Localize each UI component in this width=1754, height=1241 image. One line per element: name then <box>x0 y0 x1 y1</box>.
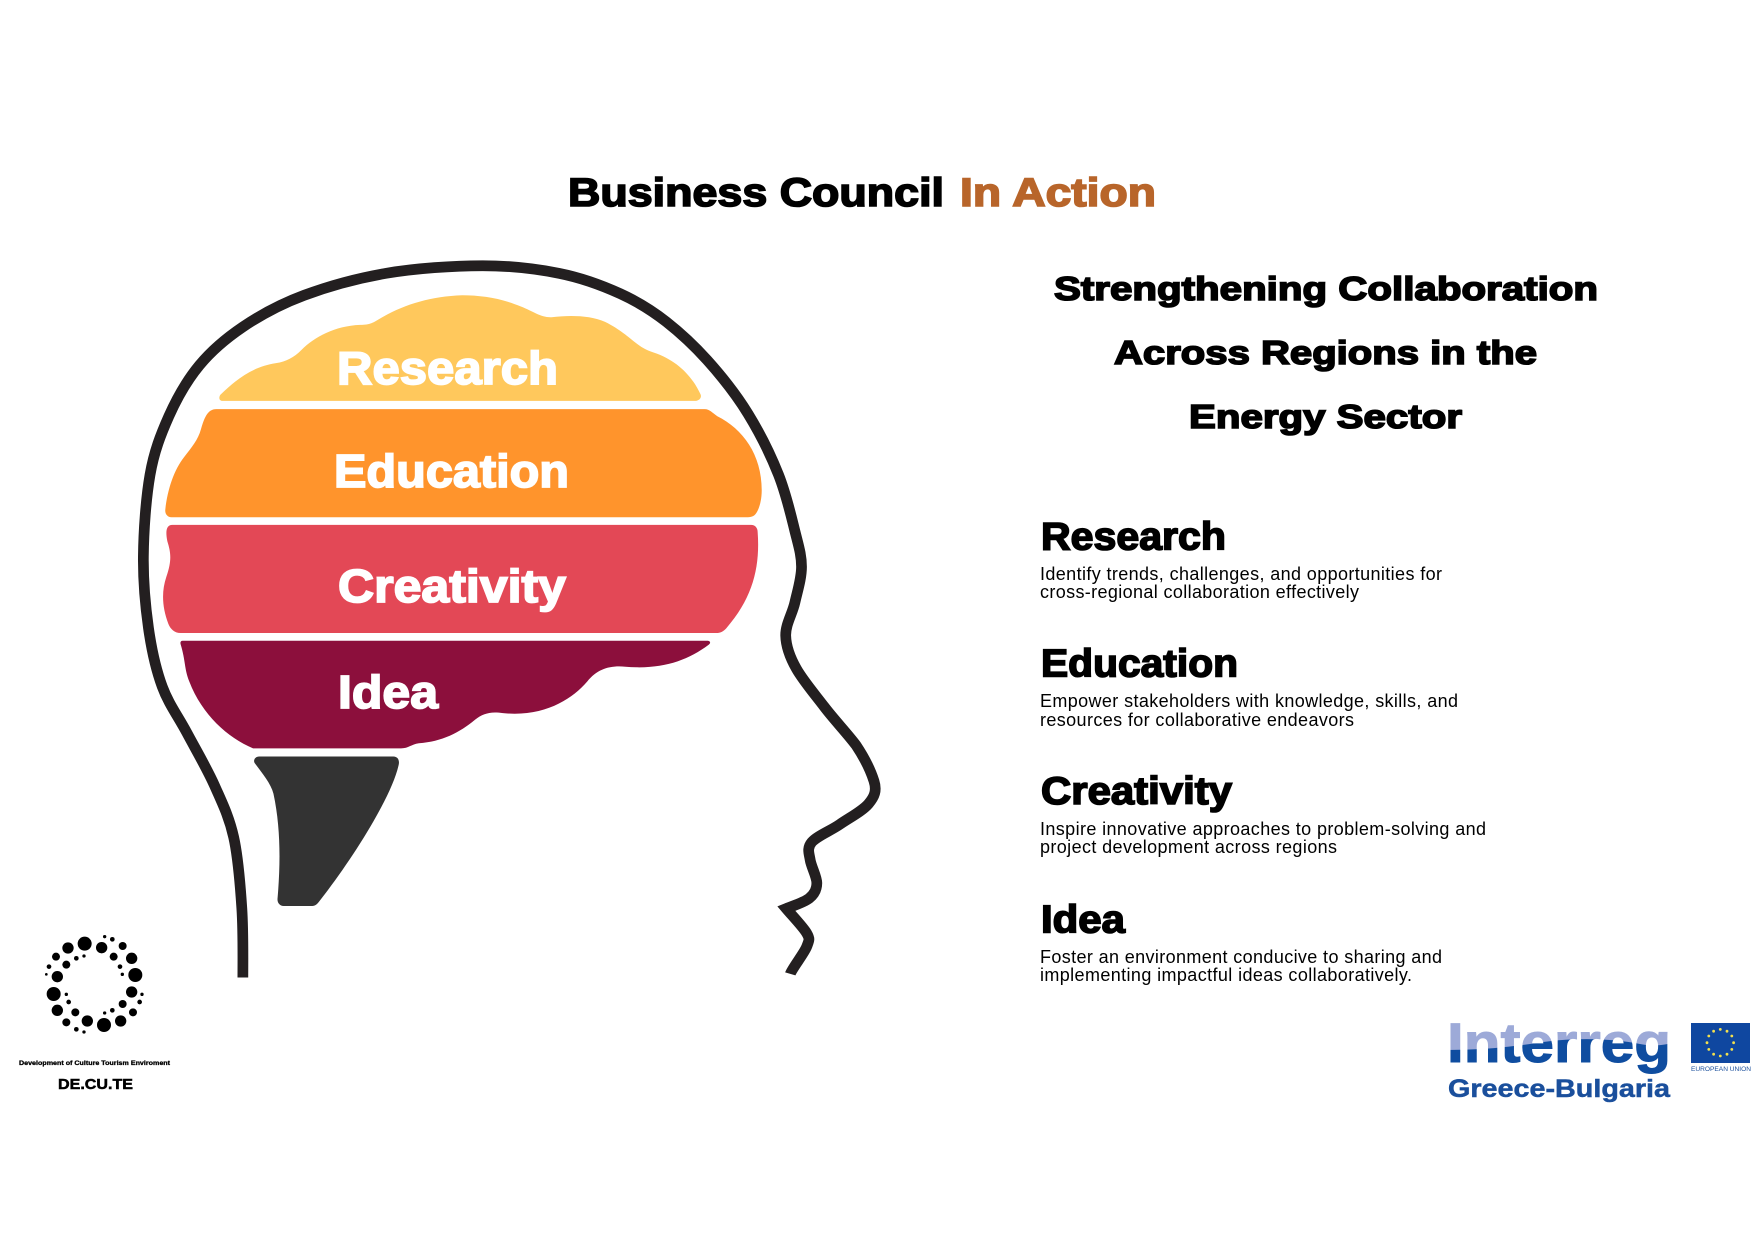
text block: education <box>1040 642 1458 730</box>
text block: research: Identify trends, challenges, and opportunities for <box>1040 564 1442 584</box>
brain layer: idea <box>180 641 710 748</box>
text block: idea: implementing impactful ideas collaboratively. <box>1040 965 1412 985</box>
text block: education: resources for collaborative endeavors <box>1040 710 1354 730</box>
text block: research: Research <box>1041 516 1226 558</box>
text block: creativity: project development across regions <box>1040 837 1337 857</box>
logo: European Union flag: EUROPEAN UNION <box>1691 1066 1751 1073</box>
text block: research <box>1040 516 1442 602</box>
text block: education: Education <box>1041 642 1238 686</box>
brain stem <box>254 757 399 906</box>
subtitle: Strengthening Collaboration <box>1054 271 1598 308</box>
label: research: Research <box>337 342 558 394</box>
logo: DE.CU.TE: DE.CU.TE <box>58 1076 133 1093</box>
subtitle <box>1054 271 1598 436</box>
text block: creativity: Creativity <box>1041 770 1233 813</box>
logo: Interreg Greece-Bulgaria: Interreg <box>1447 1011 1671 1074</box>
icon: dotted ring <box>45 935 144 1034</box>
title: In Action <box>960 171 1156 215</box>
text block: idea <box>1040 898 1442 985</box>
label: idea: Idea <box>338 666 438 718</box>
title <box>568 171 1156 215</box>
text block: creativity: Inspire innovative approaches to problem-solving and <box>1040 819 1486 839</box>
brain layer: education <box>165 409 762 517</box>
label: education: Education <box>334 445 569 497</box>
brain layer: creativity <box>163 525 758 633</box>
subtitle: Energy Sector <box>1189 399 1462 436</box>
logo: Interreg Greece-Bulgaria <box>1447 1011 1671 1103</box>
logo: Interreg Greece-Bulgaria: Greece-Bulgaria <box>1448 1075 1671 1103</box>
text block: education: Empower stakeholders with knowledge, skills, and <box>1040 691 1458 711</box>
head outline <box>143 266 875 977</box>
logo: European Union flag <box>1691 1023 1751 1073</box>
logo: DE.CU.TE: Development of Culture Tourism Enviroment <box>19 1060 171 1067</box>
logo: DE.CU.TE <box>19 935 171 1093</box>
head and brain illustration <box>143 266 875 977</box>
subtitle: Across Regions in the <box>1114 335 1537 372</box>
text block: research: cross-regional collaboration effectively <box>1040 582 1359 602</box>
text block: idea: Idea <box>1041 898 1126 942</box>
text block: idea: Foster an environment conducive to sharing and <box>1040 947 1442 967</box>
label: creativity: Creativity <box>338 560 566 612</box>
title: Business Council <box>568 171 944 215</box>
text block: creativity <box>1040 770 1486 857</box>
brain layer: research <box>219 295 701 401</box>
